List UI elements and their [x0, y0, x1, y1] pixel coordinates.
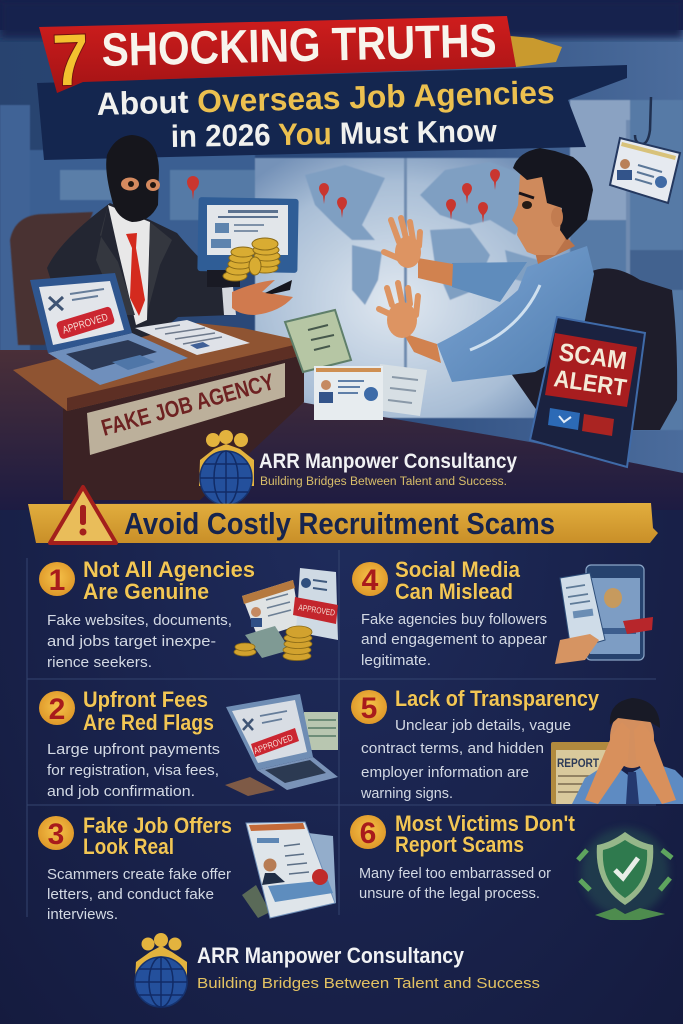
- desk: [13, 323, 307, 500]
- forearms: [403, 258, 453, 363]
- heading 4: Can Mislead: [395, 579, 513, 604]
- badge 6: 6: [360, 817, 376, 850]
- heading 2: Upfront Fees: [83, 687, 208, 712]
- title block: [39, 13, 562, 154]
- logo bottom: [135, 933, 540, 1007]
- body 3: interviews.: [47, 907, 118, 923]
- panel 4: [352, 557, 653, 669]
- lapel: [96, 205, 172, 315]
- logo top: [199, 430, 517, 505]
- heading 1: Not All Agencies: [83, 557, 255, 582]
- heading 3: Fake Job Offers: [83, 813, 232, 838]
- ear: [551, 207, 563, 227]
- suit: [47, 203, 233, 340]
- body 2: for registration, visa fees,: [47, 763, 219, 779]
- scammer in balaclava: [47, 135, 293, 340]
- body 4: Fake agencies buy followers: [361, 612, 547, 628]
- panel 1: [39, 557, 338, 671]
- logo icon: [199, 430, 254, 505]
- logo icon: [135, 933, 187, 1007]
- balaclava: [106, 135, 159, 222]
- gold tape: [510, 36, 562, 67]
- icon: phones with fake followers: [555, 565, 653, 664]
- body 4: legitimate.: [361, 653, 431, 669]
- desk top: [13, 323, 307, 411]
- heading 6: Report Scams: [395, 832, 524, 857]
- badge 1: [39, 562, 75, 597]
- heading 6: Most Victims Don't: [395, 811, 575, 836]
- heading 4: Social Media: [395, 557, 520, 582]
- shocking truths: SHOCKING TRUTHS: [101, 13, 497, 76]
- red banner: [39, 16, 516, 93]
- panel 6: [350, 811, 672, 920]
- tagline: Building Bridges Between Talent and Success: [197, 976, 540, 992]
- navy title banner: [37, 65, 627, 160]
- body 4: and engagement to appear: [361, 632, 547, 648]
- body 5: Unclear job details, vague: [395, 718, 571, 734]
- icon: embarrassed man with report: REPORT: [557, 756, 600, 770]
- cuff and hand: [222, 280, 293, 315]
- number 7: 7: [51, 18, 91, 102]
- head: [512, 172, 565, 255]
- eye: [522, 201, 532, 209]
- hook with fake id card: [610, 97, 680, 203]
- fake job agency sign: [87, 363, 285, 455]
- badge 2: 2: [49, 693, 65, 726]
- phone scam alert: SCAM: [557, 338, 628, 375]
- icon: laptop approved: [225, 694, 338, 796]
- monitor with coins: [197, 197, 299, 294]
- hair: [513, 148, 593, 240]
- subtitle line 1: About Overseas Job Agencies: [96, 74, 555, 122]
- badge 1: 1: [49, 564, 65, 597]
- heading 1: Are Genuine: [83, 579, 209, 604]
- laptop approved: APPROVED: [61, 311, 110, 337]
- young job seeker: [379, 148, 677, 430]
- icon: laptop approved: APPROVED: [252, 732, 295, 756]
- fake job agency sign: FAKE JOB AGENCY: [98, 368, 277, 441]
- company name: ARR Manpower Consultancy: [197, 943, 465, 968]
- chair: [10, 212, 93, 345]
- badge 4: 4: [362, 564, 379, 597]
- body 3: Scammers create fake offer: [47, 867, 231, 883]
- body 2: Large upfront payments: [47, 742, 220, 758]
- heading 3: Look Real: [83, 834, 174, 859]
- desk body: [63, 352, 304, 500]
- body 1: and jobs target inexpe-: [47, 634, 216, 650]
- phone scam alert: [530, 317, 645, 467]
- badge 5: 5: [361, 692, 377, 725]
- backpack: [510, 268, 677, 430]
- heading 2: Are Red Flags: [83, 710, 214, 735]
- section banner: [28, 487, 658, 543]
- paper on desk: [135, 320, 250, 355]
- neck: [535, 235, 575, 264]
- body 1: Fake websites, documents,: [47, 613, 232, 629]
- body 6: Many feel too embarrassed or: [359, 866, 551, 882]
- icon: fake offer letter: [242, 822, 336, 918]
- panel 2: [39, 687, 338, 800]
- card grid lines: [27, 550, 656, 917]
- eyes: [121, 178, 160, 191]
- warning icon: [50, 487, 116, 543]
- map: continents: [305, 162, 545, 305]
- body 1: rience seekers.: [47, 655, 152, 671]
- icon: green shield: [578, 828, 672, 920]
- shirt: [108, 205, 150, 325]
- laptop approved: [30, 273, 188, 385]
- icon: embarrassed man with report: [551, 698, 683, 804]
- certificate and id cards: [285, 310, 427, 420]
- raised hands: [379, 218, 421, 338]
- coins: [223, 238, 280, 281]
- body 5: warning signs.: [360, 786, 453, 802]
- banner heading: Avoid Costly Recruitment Scams: [124, 506, 555, 541]
- badge 3: 3: [48, 818, 64, 851]
- red tie: [126, 233, 145, 316]
- backpack strap: [528, 262, 594, 290]
- body 2: and job confirmation.: [47, 784, 195, 800]
- icon: documents and coins: APPROVED: [298, 602, 336, 618]
- phone scam alert: ALERT: [552, 365, 629, 402]
- panel 5: [351, 686, 683, 804]
- company name: ARR Manpower Consultancy: [259, 450, 517, 473]
- badge 3: [38, 816, 74, 851]
- body 5: contract terms, and hidden: [361, 741, 544, 757]
- scene: wall and world map: [0, 100, 683, 430]
- body 5: employer information are: [361, 765, 529, 781]
- panel 3: [38, 813, 336, 923]
- heading 5: Lack of Transparency: [395, 686, 599, 711]
- floor: [0, 350, 683, 510]
- tagline: Building Bridges Between Talent and Success.: [260, 476, 507, 488]
- map pins: [187, 169, 500, 223]
- shirt torso and sleeves: [437, 246, 594, 382]
- badge 2: [39, 691, 75, 726]
- badge 4: [352, 562, 388, 597]
- badge 5: [351, 690, 387, 725]
- icon: documents and coins: [234, 568, 338, 660]
- body 6: unsure of the legal process.: [359, 886, 540, 902]
- badge 6: [350, 815, 386, 850]
- body 3: letters, and conduct fake: [47, 887, 214, 903]
- subtitle line 2: in 2026 You Must Know: [171, 113, 498, 154]
